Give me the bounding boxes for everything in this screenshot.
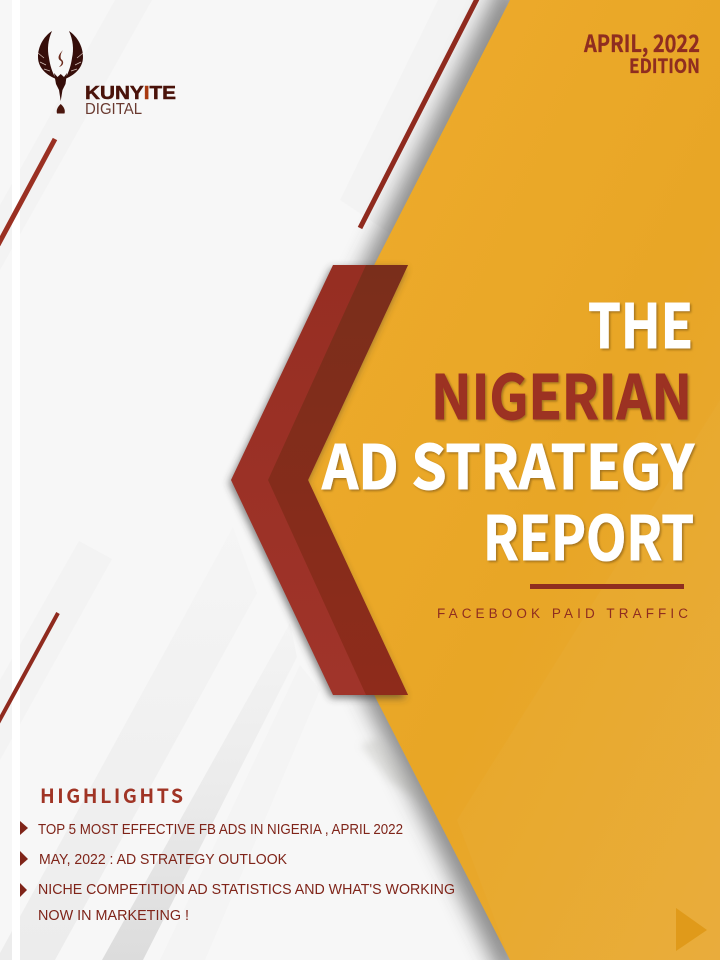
chevron [229, 265, 408, 698]
edition date: APRIL, 2022 [583, 25, 700, 59]
highlight 3: NOW IN MARKETING ! [38, 908, 189, 924]
highlights [20, 780, 455, 924]
highlight 3: NICHE COMPETITION AD STATISTICS AND WHAT'S WORKING [38, 882, 455, 898]
orange panel [264, 0, 720, 960]
edition date: EDITION [629, 50, 700, 79]
title: THE [588, 277, 693, 366]
icon: phoenix [38, 31, 83, 114]
left accent line upper [0, 139, 55, 245]
logo subtitle: DIGITAL [85, 101, 142, 118]
highlights heading: HIGHLIGHTS [40, 780, 183, 809]
top accent line [360, 0, 477, 228]
subtitle: FACEBOOK PAID TRAFFIC [437, 606, 688, 621]
edition date [583, 25, 700, 79]
play icon [676, 908, 707, 951]
highlight 2: MAY, 2022 : AD STRATEGY OUTLOOK [39, 852, 287, 868]
orange panel shadow [256, 0, 520, 960]
logo [38, 31, 176, 118]
highlight 3 [20, 882, 455, 924]
title: NIGERIAN [431, 348, 692, 437]
logo wordmark: KUNY ITE [85, 82, 176, 103]
left accent line lower [0, 613, 58, 723]
orange facet [457, 400, 720, 960]
title: AD STRATEGY [321, 418, 695, 507]
title [321, 277, 695, 578]
shaded wedge [360, 738, 432, 806]
title divider [530, 584, 684, 589]
highlight 1: TOP 5 MOST EFFECTIVE FB ADS IN NIGERIA , APRIL 2022 [38, 822, 403, 838]
